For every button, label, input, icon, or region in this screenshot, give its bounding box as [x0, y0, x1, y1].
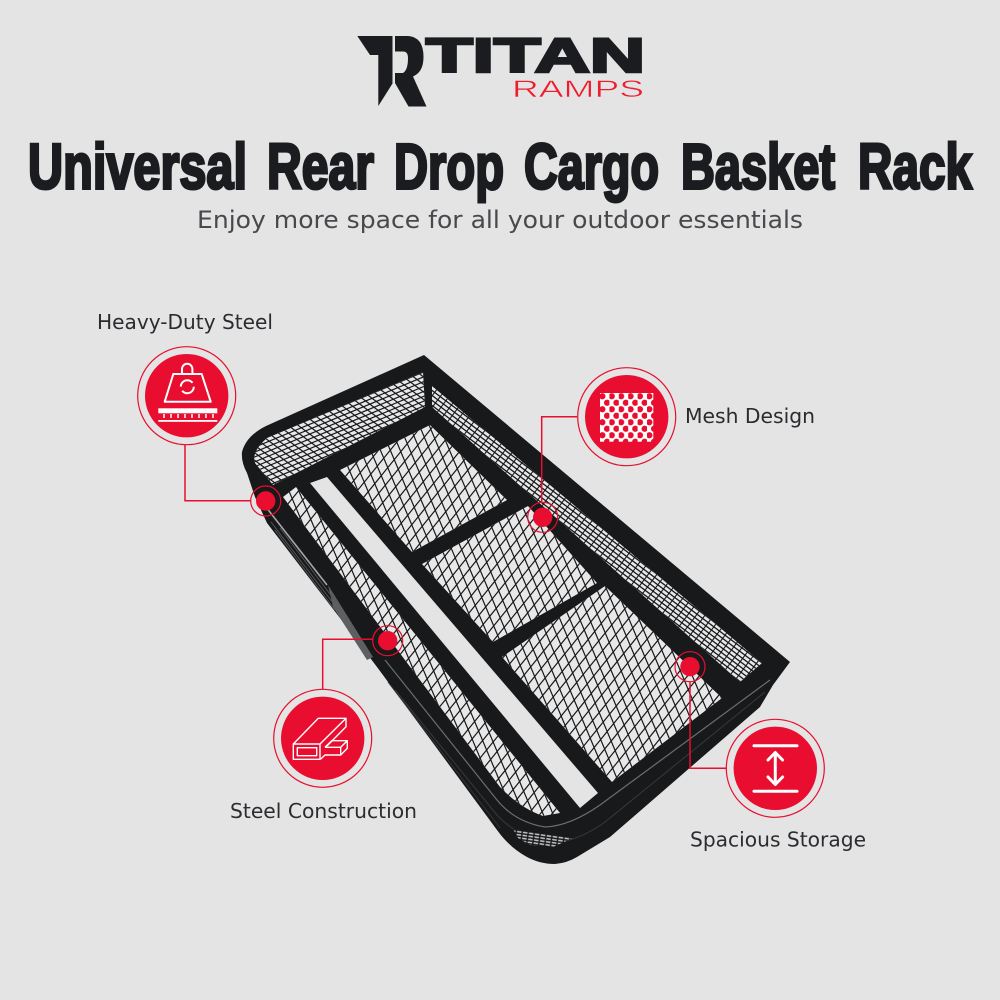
icon: steel tubes: [293, 718, 347, 759]
floor mesh panels and left strip: [283, 425, 722, 816]
icon: mesh: [600, 393, 653, 442]
connector line: [542, 417, 577, 503]
badge disc: [734, 727, 817, 810]
callout: Spacious Storage: [675, 652, 866, 852]
badge ring: [138, 347, 236, 445]
title: [28, 130, 972, 202]
marker dot: [675, 652, 705, 682]
callout: Mesh Design: [528, 368, 815, 532]
connector line: [323, 639, 373, 689]
connector line: [185, 445, 251, 501]
badge disc: [281, 697, 364, 780]
label: Heavy-Duty Steel: [97, 310, 273, 334]
badge disc: [585, 375, 668, 458]
badge ring: [578, 368, 676, 466]
icon: weight on plate: [158, 364, 217, 422]
connector line: [690, 682, 727, 768]
title: Cargo: [524, 130, 659, 202]
label: Spacious Storage: [690, 828, 866, 852]
badge ring: [726, 719, 824, 817]
badge disc: [145, 354, 228, 437]
callout: Heavy-Duty Steel: [97, 310, 281, 516]
top-left wall mesh: [254, 372, 425, 485]
icon: height arrows: [754, 746, 797, 791]
title: Universal: [28, 130, 247, 202]
title: Drop: [394, 130, 504, 202]
logo wordmark TITAN: TITAN: [426, 30, 645, 83]
title: Rear: [267, 130, 374, 202]
side wall hatching and highlights: [262, 502, 770, 843]
basket silhouette: [242, 355, 790, 864]
marker dot: [373, 626, 403, 656]
right wall mesh: [432, 386, 762, 682]
cargo basket rack: [242, 355, 790, 864]
logo: Titan Ramps: [357, 30, 645, 106]
lower front mesh sliver: [513, 829, 573, 847]
marker dot: [251, 486, 281, 516]
open slot: [310, 477, 598, 808]
label: Mesh Design: [685, 404, 815, 428]
subtitle: Enjoy more space for all your outdoor essentials: [197, 206, 803, 234]
marker dot: [528, 502, 558, 532]
callout: Steel Construction: [230, 626, 417, 823]
logo wordmark RAMPS: RAMPS: [512, 76, 644, 103]
label: Steel Construction: [230, 799, 417, 823]
title: Basket: [681, 130, 835, 202]
badge ring: [274, 689, 372, 787]
icon: TR monogram: [357, 36, 426, 106]
